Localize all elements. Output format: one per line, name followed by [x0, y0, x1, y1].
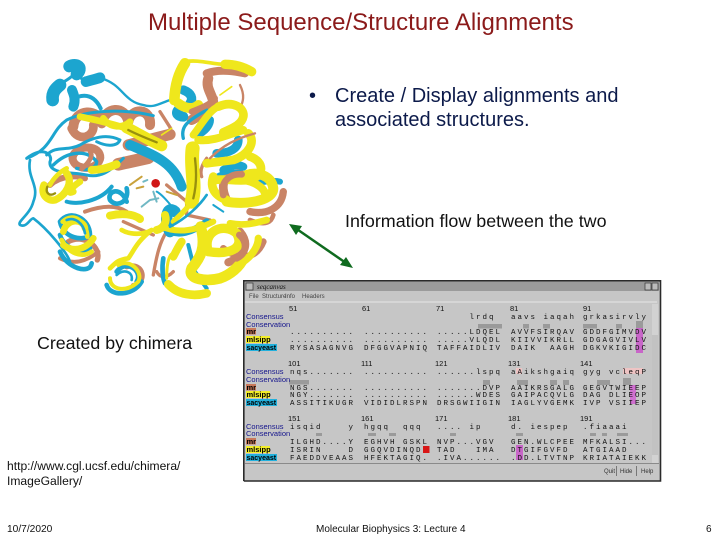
sequence rows: ILGHD....Y — [290, 439, 355, 447]
conservation bars and highlights — [289, 321, 643, 460]
sequence rows: .......... — [364, 392, 429, 400]
sequence labels: Conservation — [246, 429, 290, 438]
sequence rows: NVP...VGV — [437, 439, 502, 447]
column numbers: 61 — [362, 304, 370, 313]
sequence rows: ISRIN D — [290, 447, 355, 455]
sequence rows: .DD.LTVTNP — [511, 455, 576, 463]
double-headed arrow — [289, 224, 353, 268]
column numbers: 81 — [510, 304, 518, 313]
caption: created by chimera: Created by chimera — [37, 333, 192, 353]
sequence rows — [290, 314, 648, 463]
sequence labels: mr — [246, 437, 256, 446]
footer lecture title: Molecular Biophysics 3: Lecture 4 — [316, 524, 466, 535]
sequence rows: .......DVP — [437, 385, 502, 393]
column numbers: 131 — [508, 359, 521, 368]
source url — [7, 459, 180, 488]
sequence rows: ......WDES — [437, 392, 502, 400]
column numbers: 51 — [289, 304, 297, 313]
source url: ImageGallery/ — [7, 474, 82, 488]
sequence rows: .......... — [290, 337, 355, 345]
column numbers: 121 — [435, 359, 448, 368]
sequence rows: aavs iaqah — [511, 314, 576, 322]
sequence rows: .......... — [364, 337, 429, 345]
sequence labels: Consensus — [246, 422, 284, 431]
sequence rows: ASSITIKUGR — [290, 400, 355, 408]
sequence rows: KIIVVIKRLL — [511, 337, 576, 345]
sequence rows: NGY....... — [290, 392, 355, 400]
column numbers: 151 — [288, 414, 301, 423]
sequence labels: mr — [246, 383, 256, 392]
sequence labels — [246, 312, 290, 462]
menu bar: Info — [285, 294, 296, 300]
sequence rows: aAikshgaiq — [511, 369, 576, 377]
sequence rows: .....VLQDL — [437, 337, 502, 345]
column numbers: 91 — [583, 304, 591, 313]
sequence rows: nqs....... — [290, 369, 355, 377]
bottom button bar: Hide — [620, 469, 633, 475]
sequence rows: EGHVH GSKL — [364, 439, 429, 447]
menu bar: Structure — [262, 294, 287, 300]
sequence rows: .....LDQEL — [437, 329, 502, 337]
sequence rows: DGKVKIGIDC — [583, 345, 648, 353]
sequence rows: DRSGWIIGIN — [437, 400, 502, 408]
bullet text: associated structures. — [335, 109, 530, 131]
sequence labels: mlsipp — [246, 445, 271, 454]
column numbers: 71 — [436, 304, 444, 313]
sequence rows: TAD IMA — [437, 447, 502, 455]
sequence rows: DAG DLIEOP — [583, 392, 648, 400]
sequence rows: .... ip — [437, 424, 502, 432]
sequence rows: IAGLYVGEMK — [511, 400, 576, 408]
sequence labels: mlsipp — [246, 390, 271, 399]
scrollbar — [652, 304, 658, 463]
footer date: 10/7/2020 — [7, 524, 52, 535]
menu bar: Headers — [302, 294, 325, 300]
sequence labels: Conservation — [246, 375, 290, 384]
sequence rows: TAFFAIDLIV — [437, 345, 502, 353]
sequence labels: sacyeast — [246, 455, 277, 462]
sequence rows: GEGVTWIEEP — [583, 385, 648, 393]
sequence rows: .......... — [364, 329, 429, 337]
sequence rows: HFEKTAGIQ. — [364, 455, 429, 463]
menu bar: File — [249, 294, 259, 300]
bottom button bar: Help — [641, 469, 654, 475]
sequence rows: .fiaaai — [583, 424, 648, 432]
column numbers — [288, 304, 593, 423]
column numbers: 141 — [580, 359, 593, 368]
bullet text: • — [309, 85, 316, 107]
sequence rows: FAEDDVEAAS — [290, 455, 355, 463]
sequence rows: hgqq qqq — [364, 424, 429, 432]
sequence rows: DAIK AAGH — [511, 345, 576, 353]
sequence rows: DTGIFGVFD — [511, 447, 576, 455]
column numbers: 161 — [361, 414, 374, 423]
sequence rows: d. iespep — [511, 424, 576, 432]
sequence rows: NGS....... — [290, 385, 355, 393]
bottom button bar — [245, 463, 659, 476]
sequence rows: gyg vcleqP — [583, 369, 648, 377]
column numbers: 111 — [361, 359, 372, 368]
sequence labels: mr — [246, 327, 256, 336]
bullet text: Create / Display alignments and — [335, 85, 618, 107]
column numbers: 171 — [435, 414, 448, 423]
information flow label: Information flow between the two — [345, 211, 607, 231]
column numbers: 101 — [288, 359, 301, 368]
sequence rows: GEN.WLCPEE — [511, 439, 576, 447]
window title bar — [245, 282, 659, 291]
sequence rows: .......... — [364, 385, 429, 393]
page number: 6 — [706, 524, 712, 535]
sequence rows: isqid y — [290, 424, 355, 432]
title: Multiple Sequence/Structure Alignments — [148, 9, 574, 36]
sequence rows: ATGIAAD — [583, 447, 648, 455]
column numbers: 191 — [580, 414, 593, 423]
bullet text — [309, 85, 618, 131]
sequence rows: GGQVDINQD — [364, 447, 429, 455]
column numbers: 181 — [508, 414, 521, 423]
sequence rows: GDDFGIMVDV — [583, 329, 648, 337]
sequence rows: RYSASAGNVG — [290, 345, 355, 353]
sequence rows: VIDIDLRSPN — [364, 400, 429, 408]
sequence rows: grkasirvly — [583, 314, 648, 322]
sequence rows: .IVA...... — [437, 455, 502, 463]
sequence rows: lrdq — [437, 314, 496, 322]
sequence labels: Conservation — [246, 320, 290, 329]
sequence labels: Consensus — [246, 367, 284, 376]
sequence rows: .......... — [364, 369, 429, 377]
sequence rows: .......... — [290, 329, 355, 337]
bottom button bar: Quit — [604, 469, 615, 475]
sequence labels: mlsipp — [246, 335, 271, 344]
sequence rows: KRIATAIEKK — [583, 455, 648, 463]
sequence rows: GAIPACQVLG — [511, 392, 576, 400]
source url: http://www.cgl.ucsf.edu/chimera/ — [7, 459, 180, 473]
sequence rows: AAIKRSGALG — [511, 385, 576, 393]
sequence labels: sacyeast — [246, 345, 277, 352]
sequence labels: Consensus — [246, 312, 284, 321]
sequence rows: ......lspq — [437, 369, 502, 377]
sequence rows: MFKALSI... — [583, 439, 648, 447]
sequence rows: GDGAGVIVLV — [583, 337, 648, 345]
sequence labels: sacyeast — [246, 400, 277, 407]
window title bar: seqcanvas — [257, 283, 286, 291]
menu bar — [245, 294, 657, 302]
sequence rows: IVP VSIIEP — [583, 400, 648, 408]
alignment window — [243, 280, 661, 481]
sequence rows: DFGGVAPNIQ — [364, 345, 429, 353]
sequence rows: AVVFSIRQAV — [511, 329, 576, 337]
